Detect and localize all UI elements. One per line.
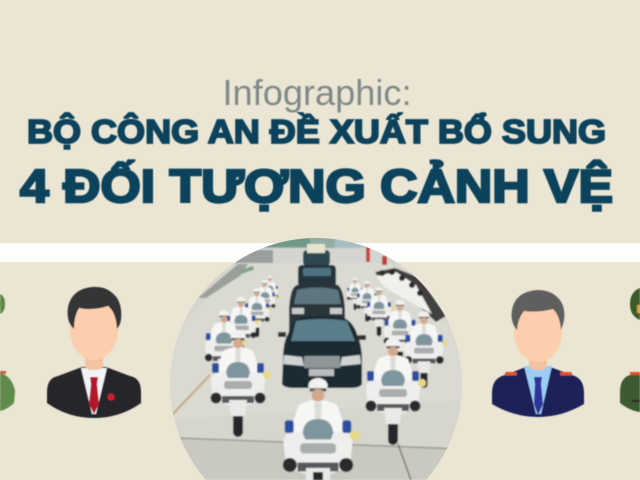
heading line 1: BỘ CÔNG AN ĐỀ XUẤT BỔ SUNG (27, 112, 606, 150)
white band (0, 243, 640, 262)
lead car (278, 316, 366, 388)
distant car (303, 244, 330, 266)
icon: officer in navy uniform (492, 290, 584, 417)
icon: official in black suit (47, 287, 141, 418)
title (20, 72, 613, 212)
road (174, 263, 461, 448)
lead motorcycle (283, 378, 360, 480)
left column of motorcycles (205, 276, 280, 437)
crowd on right (375, 268, 446, 322)
road joints (178, 438, 462, 449)
subtitle: Infographic: Infographic: (222, 72, 412, 113)
trees and sky (262, 238, 336, 249)
photo: motorcade in circle (165, 235, 467, 480)
buildings and flags (260, 247, 372, 250)
stick (172, 375, 210, 415)
icon: soldier in dark green, cropped at right edge (620, 288, 640, 412)
third car (298, 265, 336, 287)
second car (289, 283, 345, 332)
left roadside (198, 264, 248, 298)
right column of motorcycles (347, 278, 448, 445)
icon: soldier in green, cropped at left edge (0, 294, 15, 411)
heading line 2: 4 ĐỐI TƯỢNG CẢNH VỆ (20, 160, 613, 212)
